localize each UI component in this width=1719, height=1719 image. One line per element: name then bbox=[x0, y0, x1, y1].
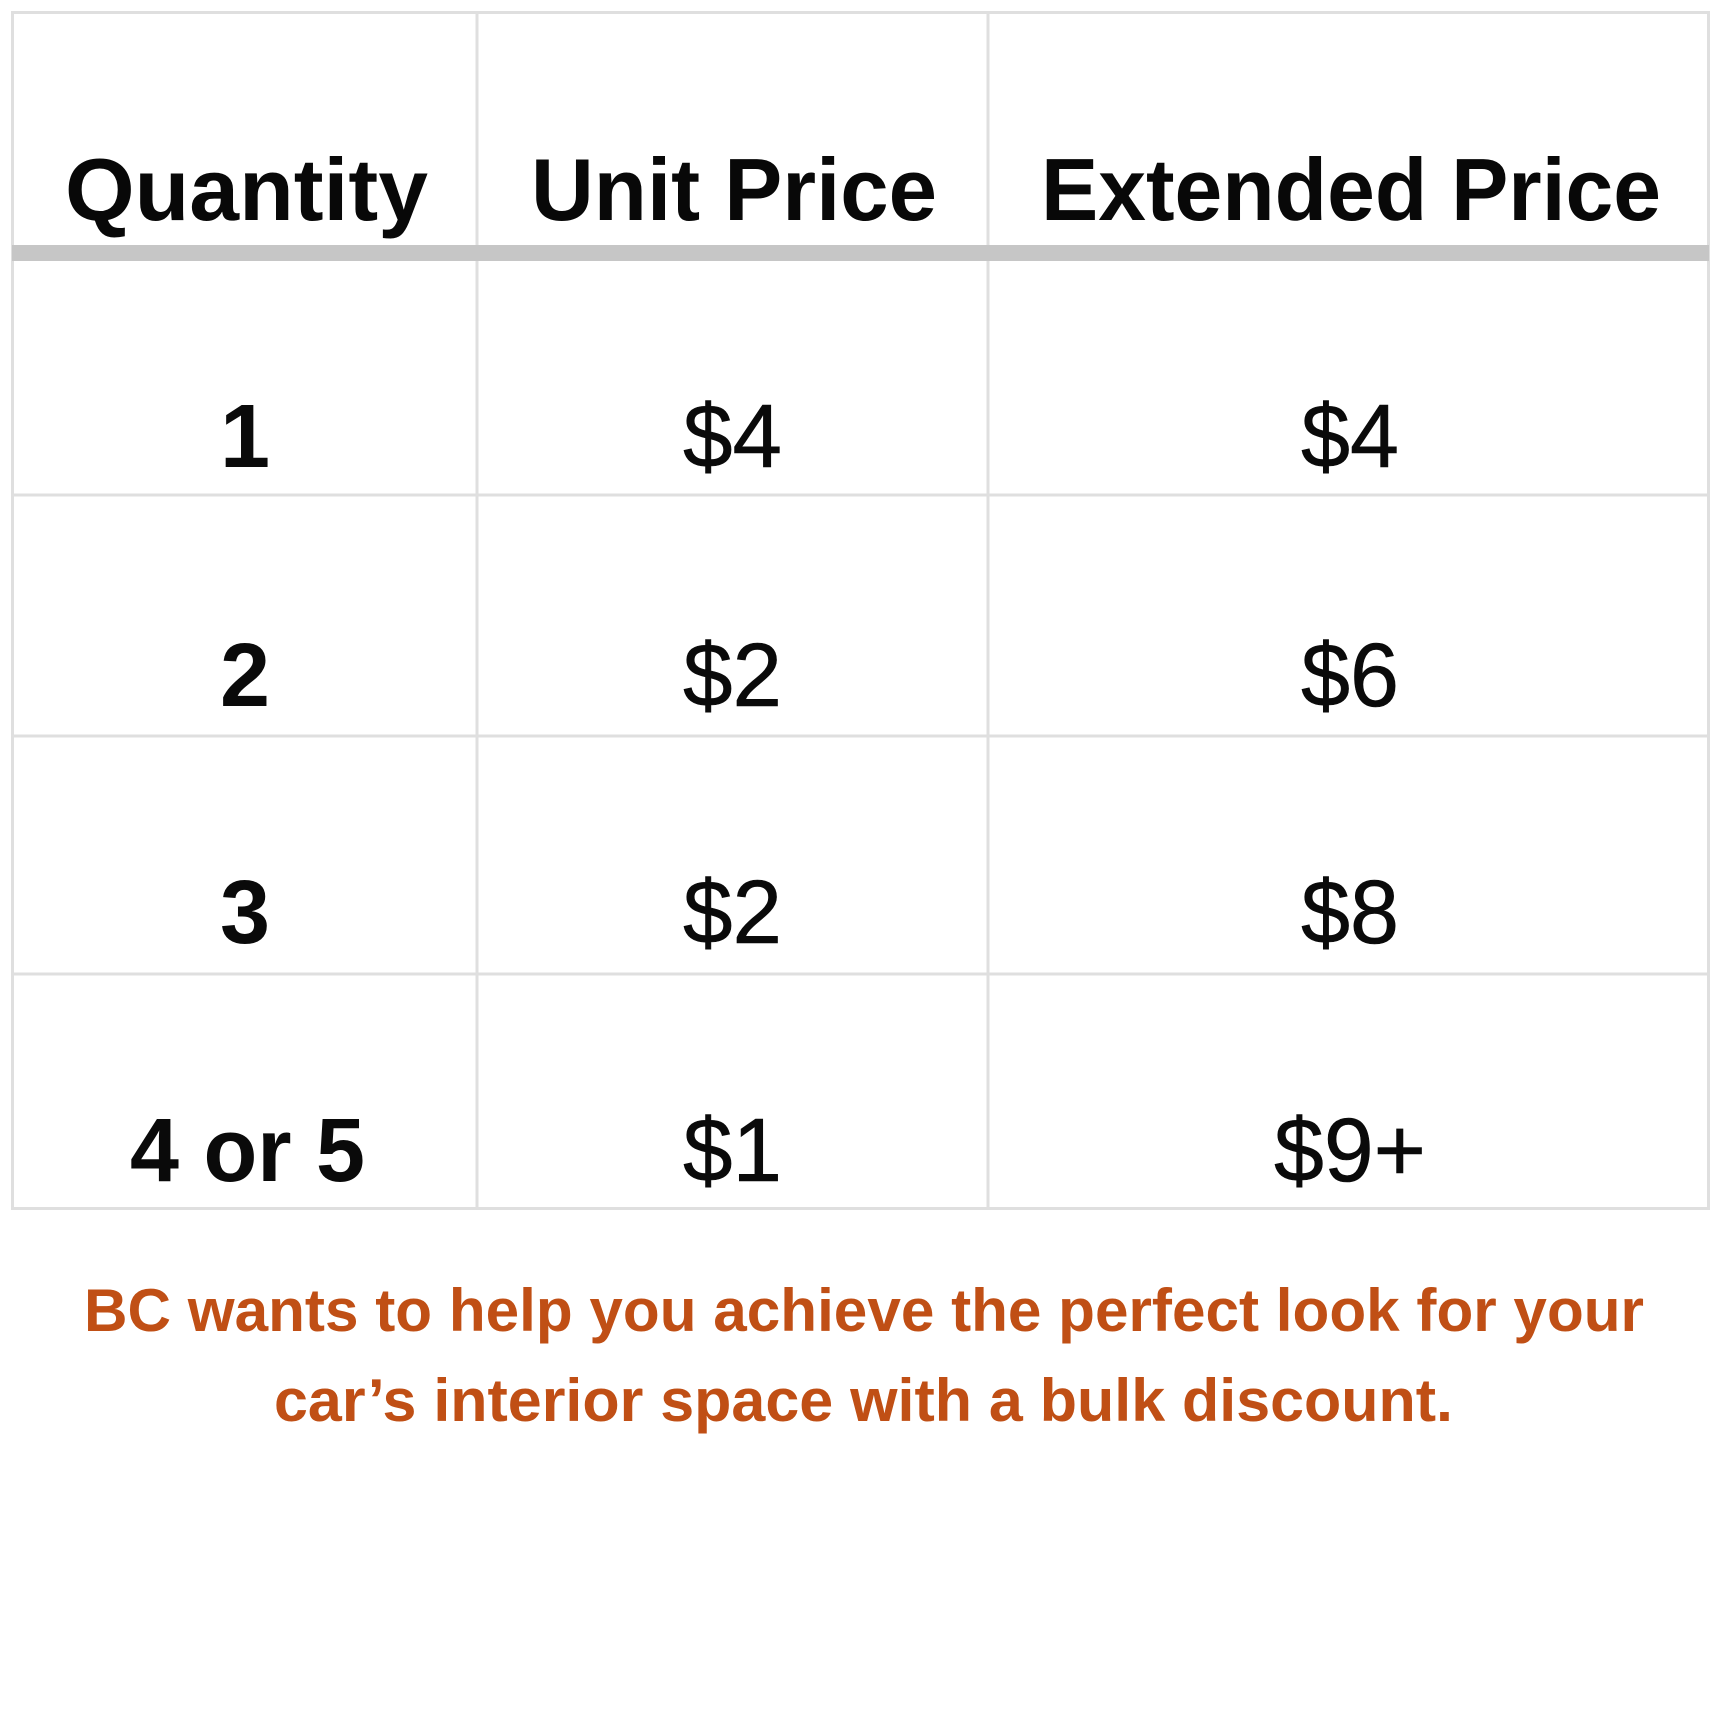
table header row: Extended Price bbox=[1041, 140, 1661, 239]
row: quantity 3: $8 bbox=[1301, 863, 1399, 963]
row: quantity 2 bbox=[220, 626, 1399, 726]
row: quantity 4 or 5: $1 bbox=[683, 1101, 782, 1201]
caption: bulk discount message: BC wants to help you achieve the perfect look for your bbox=[84, 1277, 1644, 1344]
caption: bulk discount message: car’s interior space with a bulk discount. bbox=[274, 1367, 1453, 1434]
table header row: Unit Price bbox=[531, 140, 937, 239]
row: quantity 1: 1 bbox=[220, 387, 270, 487]
row: quantity 2: 2 bbox=[220, 626, 270, 726]
row: quantity 2: $6 bbox=[1301, 626, 1399, 726]
table header row: Quantity bbox=[65, 140, 428, 239]
row: quantity 1: $4 bbox=[683, 387, 782, 487]
row: quantity 3 bbox=[220, 863, 1399, 963]
table header row bbox=[65, 140, 1661, 239]
row: quantity 4 or 5: 4 or 5 bbox=[130, 1101, 365, 1201]
row: quantity 1 bbox=[220, 387, 1399, 487]
row: quantity 4 or 5 bbox=[130, 1101, 1426, 1201]
row: quantity 3: $2 bbox=[683, 863, 782, 963]
pricing table bbox=[12, 12, 1709, 1208]
row: quantity 4 or 5: $9+ bbox=[1274, 1101, 1426, 1201]
row: quantity 3: 3 bbox=[220, 863, 270, 963]
caption: bulk discount message bbox=[84, 1277, 1644, 1434]
row: quantity 2: $2 bbox=[683, 626, 782, 726]
row: quantity 1: $4 bbox=[1301, 387, 1399, 487]
